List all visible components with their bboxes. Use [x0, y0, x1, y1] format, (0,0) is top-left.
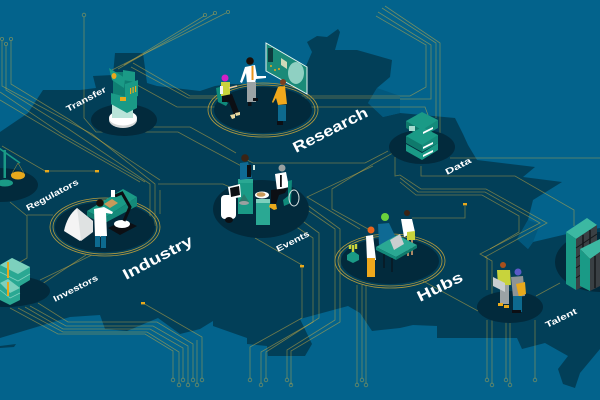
figure: lab technician	[94, 199, 113, 248]
icon: data screen	[266, 43, 307, 94]
icon: server racks	[566, 218, 600, 291]
figure: wheelchair user	[269, 164, 299, 210]
figure: woman in orange hat	[366, 226, 376, 277]
icon: white machine	[64, 208, 93, 241]
node: server racks	[555, 218, 600, 292]
label: Data: Data	[443, 155, 473, 177]
node: data	[389, 112, 455, 164]
figure: seated researcher	[216, 74, 240, 119]
node: hubs	[335, 210, 445, 288]
icon: medical cart	[221, 184, 249, 223]
node: technology transfer	[91, 68, 157, 136]
label: Transfer: Transfer	[64, 84, 109, 114]
node: investors	[0, 258, 50, 307]
label: Regulators: Regulators	[24, 177, 80, 213]
icon: catering table	[255, 192, 270, 225]
icon: green workbench	[87, 189, 137, 224]
icon: meeting table	[376, 234, 417, 272]
figure: hub team	[378, 210, 415, 256]
icon: server stack	[406, 112, 438, 160]
label: Investors: Investors	[51, 272, 100, 304]
label: Talent: Talent	[543, 306, 579, 330]
icon: money stacks	[0, 258, 30, 305]
icon: transfer tower	[109, 68, 138, 128]
label: Research: Research	[290, 104, 371, 157]
node: industry	[50, 189, 160, 256]
label: Industry: Industry	[120, 232, 197, 284]
icon: robot arm	[108, 190, 137, 235]
figure: visitor and podium	[238, 154, 255, 214]
node: talent	[477, 262, 543, 323]
icon: scales of justice	[0, 146, 25, 186]
node: events	[213, 154, 309, 238]
label: Events: Events	[274, 228, 311, 254]
figure: two colleagues	[493, 262, 526, 313]
node: regulators	[0, 146, 38, 202]
figure: standing colleague	[272, 79, 287, 125]
figure: presenter	[240, 57, 266, 106]
icon: potted plant	[347, 244, 359, 263]
node: research	[208, 43, 318, 137]
label: Hubs: Hubs	[414, 269, 466, 306]
